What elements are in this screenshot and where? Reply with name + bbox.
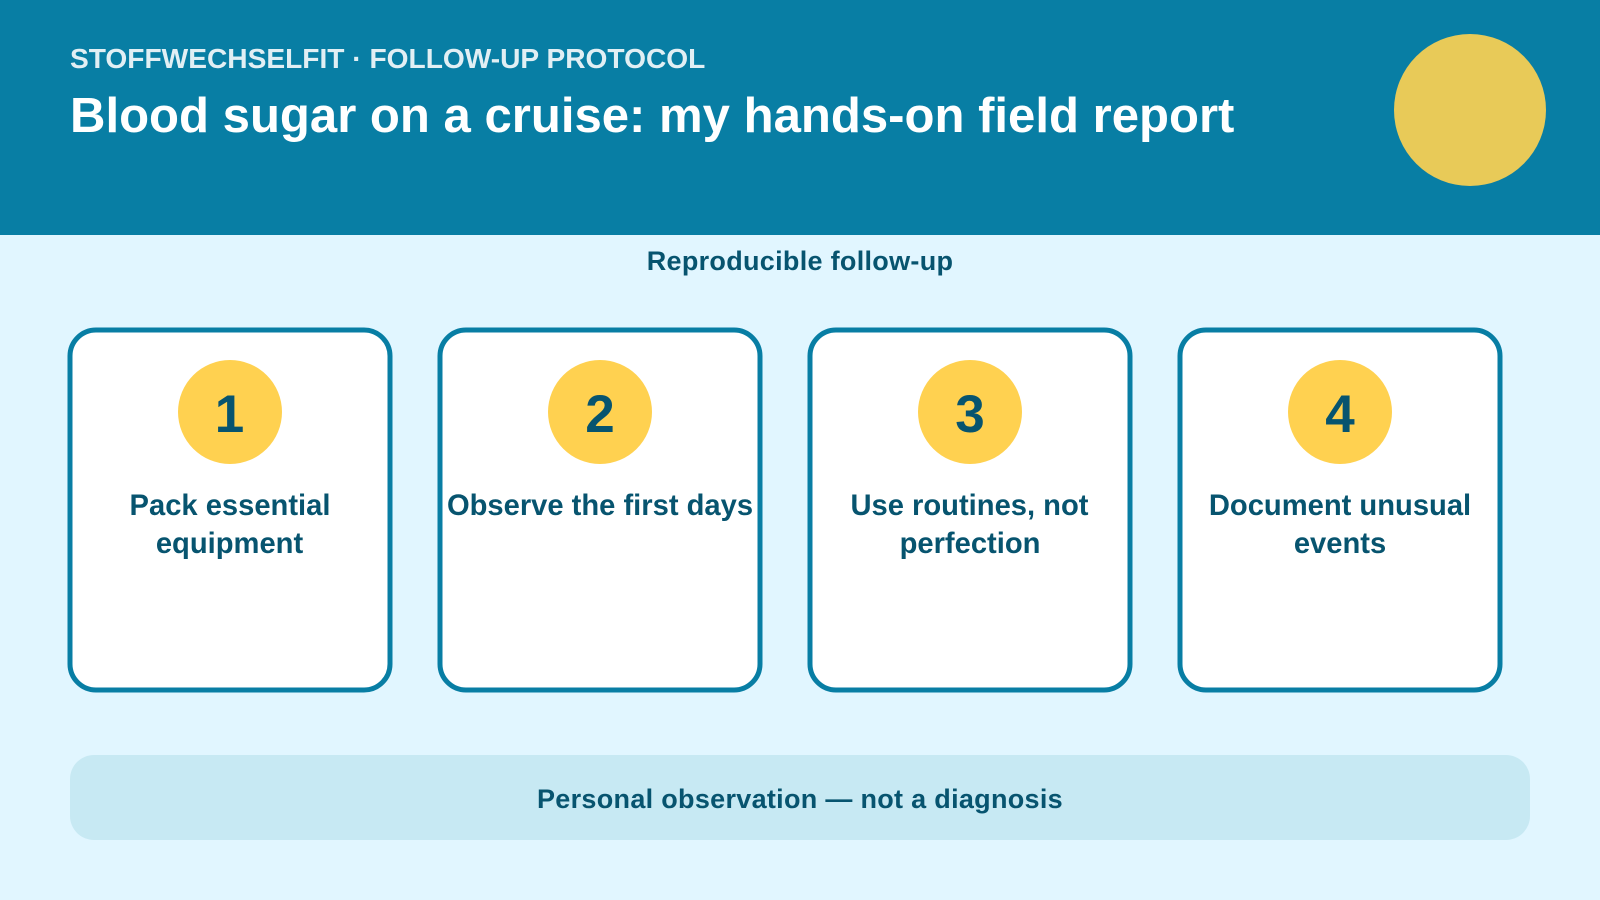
step badge 1	[178, 360, 282, 464]
card 3	[810, 330, 1130, 690]
step badge 4	[1288, 360, 1392, 464]
section heading: Reproducible follow-up	[647, 246, 953, 276]
decorative sun circle	[1394, 34, 1546, 186]
step badge 1: 1	[215, 385, 244, 444]
step label 2: Observe the first days	[447, 490, 753, 522]
step badge 2	[548, 360, 652, 464]
step label 1: Pack essential	[130, 490, 330, 522]
step badge 3	[918, 360, 1022, 464]
step badge 3: 3	[955, 385, 985, 444]
step label 4: Document unusual	[1209, 490, 1471, 522]
kicker: STOFFWECHSELFIT · FOLLOW-UP PROTOCOL	[70, 43, 705, 74]
step label 3: perfection	[900, 528, 1040, 560]
card 1	[70, 330, 390, 690]
step label 3: Use routines, not	[850, 490, 1089, 522]
title: Blood sugar on a cruise: my hands-on field report	[70, 89, 1234, 143]
step label 1: equipment	[156, 528, 303, 560]
step badge 2: 2	[585, 385, 615, 444]
footer note	[70, 755, 1530, 840]
card 4	[1180, 330, 1500, 690]
step label 4: events	[1294, 528, 1386, 560]
header band	[0, 0, 1600, 235]
step badge 4: 4	[1325, 385, 1355, 444]
footer note: Personal observation — not a diagnosis	[537, 784, 1063, 814]
card 2	[440, 330, 760, 690]
